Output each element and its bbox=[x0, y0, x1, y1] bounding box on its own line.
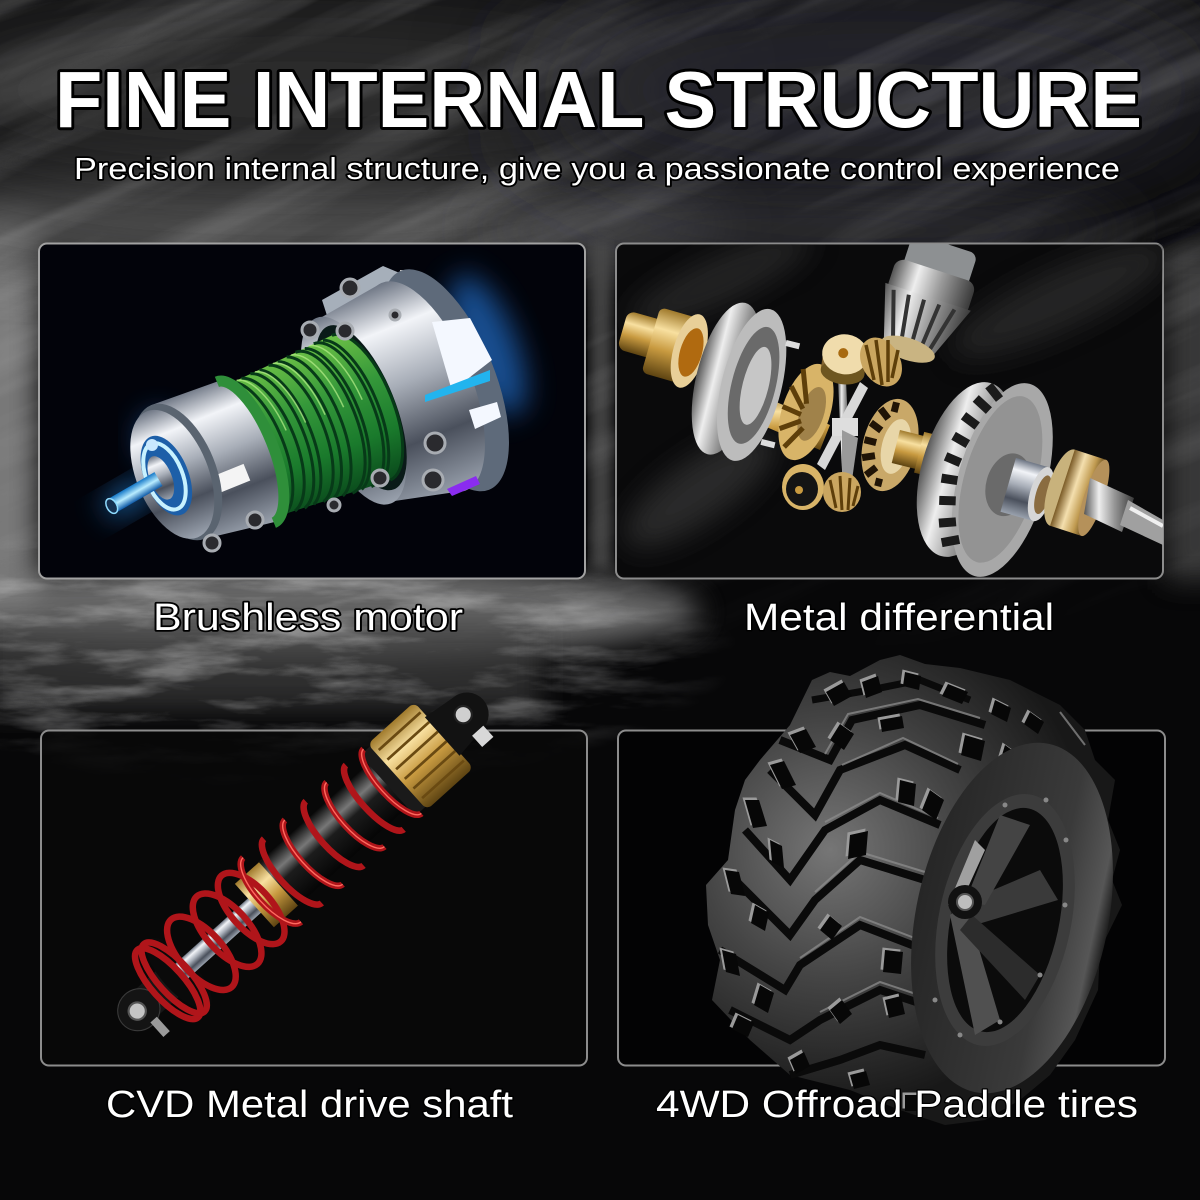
right brass gear bbox=[861, 398, 932, 492]
panel: brushless motor bbox=[39, 244, 585, 625]
top mount bbox=[425, 680, 500, 756]
lower spring seat bbox=[136, 928, 222, 1019]
rim bolts bbox=[932, 798, 1068, 1038]
bottom washer bbox=[782, 464, 824, 510]
label: 4WD offroad paddle tires: 4WD Offroad Paddle tires bbox=[656, 1084, 1138, 1126]
panel: metal differential bbox=[615, 242, 1164, 580]
title: FINE INTERNAL STRUCTURE bbox=[55, 55, 1142, 144]
cross pins bbox=[817, 380, 868, 480]
big silver ring gear bbox=[916, 382, 1053, 577]
label: brushless motor: Brushless motor bbox=[153, 597, 463, 639]
coil bbox=[205, 323, 420, 531]
brass ring right bbox=[1044, 449, 1110, 536]
spokes bbox=[948, 815, 1058, 1035]
panel: 4WD offroad paddle tires bbox=[618, 655, 1165, 1125]
subtitle: Precision internal structure, give you a passionate control experience bbox=[74, 151, 1120, 186]
black cylinder bbox=[259, 754, 418, 906]
spring bbox=[125, 748, 423, 1028]
left shaft bbox=[768, 402, 830, 450]
top block bbox=[322, 266, 445, 355]
rod bbox=[172, 895, 265, 981]
tire silhouette bbox=[706, 655, 1122, 1125]
hub bbox=[948, 885, 982, 919]
inner brass bbox=[235, 858, 303, 927]
center bevel gear bbox=[778, 364, 834, 460]
top brass washer bbox=[820, 334, 865, 384]
top small pinion bbox=[860, 338, 902, 386]
rim ring bbox=[914, 781, 1096, 1059]
background: dark wave texture bbox=[0, 0, 1200, 764]
collar bbox=[313, 283, 466, 518]
rear housing bbox=[354, 252, 535, 508]
label: CVD metal drive shaft: CVD Metal drive shaft bbox=[106, 1084, 513, 1126]
tread lugs bbox=[720, 670, 1044, 1111]
bottom pinion bbox=[823, 472, 861, 512]
icon: differential gear assembly bbox=[616, 244, 1163, 577]
silver ring bbox=[692, 302, 800, 461]
icon: shock absorber drive shaft bbox=[92, 666, 513, 1058]
tread chevrons bbox=[720, 680, 985, 1075]
output shaft bbox=[1084, 478, 1134, 532]
label: metal differential: Metal differential bbox=[744, 597, 1054, 639]
brass cup bbox=[618, 308, 708, 388]
front body bbox=[151, 367, 304, 549]
lower mount bbox=[126, 964, 187, 1024]
shaft bbox=[103, 472, 162, 515]
brass cap bbox=[368, 702, 473, 810]
motor highlights and bolts bbox=[146, 279, 501, 551]
icon: brushless motor illustration bbox=[65, 252, 542, 625]
top silver pinion bbox=[882, 244, 976, 363]
sidewall bbox=[881, 724, 1143, 1112]
panel: CVD metal drive shaft bbox=[41, 666, 587, 1066]
icon: offroad tire bbox=[706, 655, 1143, 1125]
